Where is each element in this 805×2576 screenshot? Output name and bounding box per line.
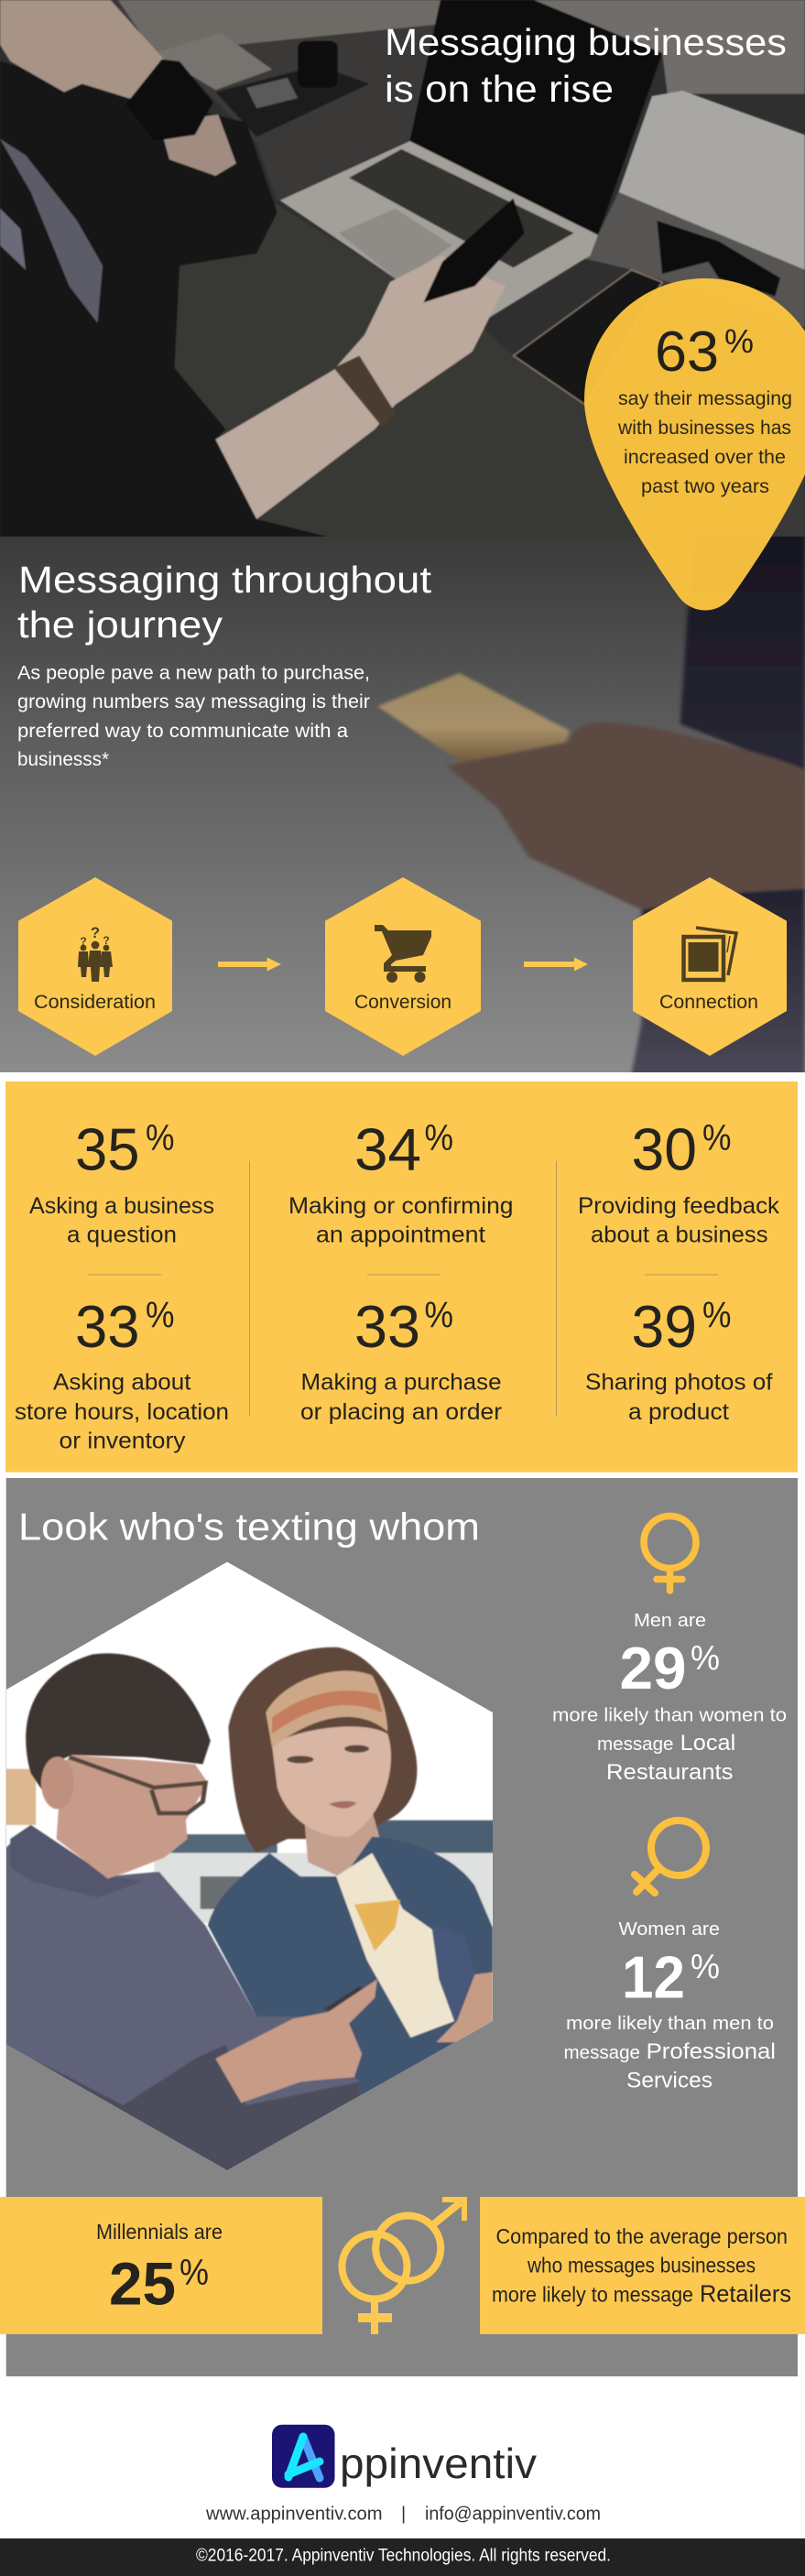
- callout: 63 percent pin: say their messaging: [618, 388, 792, 409]
- text block: journey intro: growing numbers say messaging is their: [17, 690, 370, 712]
- icon: stacked photos: [683, 928, 736, 980]
- heading: messaging businesses: is on the rise: [385, 68, 614, 110]
- text block: contact details: [205, 2505, 601, 2525]
- stat: 33 percent store hours: store hours, location: [15, 1399, 229, 1425]
- stat: women 12 percent: 12: [622, 1944, 685, 2011]
- stat: men 29 percent: message: [597, 1734, 674, 1755]
- stat: 33 percent store hours: or inventory: [59, 1429, 186, 1454]
- stat: 39 percent: %: [702, 1295, 731, 1335]
- man ear: [41, 1756, 74, 1810]
- heading: messaging businesses: [385, 21, 787, 110]
- logo: appinventiv: [272, 2425, 537, 2488]
- callout: millennials 25 percent: 25: [109, 2250, 176, 2318]
- callout: 63 percent pin: [584, 278, 805, 610]
- woman headband: [266, 1670, 387, 1748]
- stat: men 29 percent: [552, 1610, 787, 1785]
- text block: journey intro: [17, 661, 370, 770]
- phone: [324, 1985, 363, 2011]
- stat: 39 percent: a product: [628, 1399, 729, 1425]
- stat: 30 percent: 30: [632, 1116, 697, 1183]
- stat: 34 percent: Making or confirming: [288, 1193, 513, 1219]
- man neck and face: [57, 1755, 208, 1879]
- stat: women 12 percent: %: [691, 1948, 720, 1986]
- stat: men 29 percent: 29: [619, 1635, 687, 1701]
- stat: 35 percent: 35: [75, 1116, 139, 1183]
- woman neck: [304, 1813, 380, 1876]
- text block: journey intro: businesss*: [17, 748, 110, 770]
- panel: look who's texting whom: [0, 1478, 798, 2376]
- icon: shopping cart: [375, 925, 431, 983]
- woman eyes and mouth: [287, 1755, 313, 1764]
- step: connection hexagon: Connection: [659, 991, 758, 1013]
- callout: retailers comparison: Compared to the average person: [496, 2224, 788, 2248]
- callout: retailers comparison: Retailers: [700, 2280, 791, 2308]
- callout: 63 percent pin: increased over the: [624, 447, 786, 468]
- man hair: [26, 1653, 211, 1792]
- step: consideration hexagon: Consideration: [34, 991, 156, 1013]
- callout: retailers comparison: who messages businesses: [527, 2254, 756, 2277]
- stat: 33 percent purchase: Making a purchase: [300, 1370, 502, 1396]
- stat: women 12 percent: Professional: [647, 2039, 776, 2064]
- icon: people with question marks: ?: [103, 934, 110, 947]
- stat: 33 percent store hours: Asking about: [53, 1370, 191, 1396]
- callout: 63 percent pin: 63: [655, 321, 719, 384]
- icon: interlocked gender symbols: [343, 2197, 467, 2334]
- icon: people with question marks: [78, 924, 113, 982]
- stat: 30 percent: about a business: [591, 1223, 767, 1248]
- stat: 34 percent: [288, 1116, 513, 1248]
- step: conversion hexagon: [325, 877, 481, 1056]
- icon: venus symbol: [644, 1516, 696, 1591]
- stat: 35 percent: a question: [67, 1223, 177, 1248]
- stat: women 12 percent: Services: [626, 2069, 713, 2093]
- step: consideration hexagon: [18, 877, 172, 1056]
- stat: 30 percent: %: [702, 1118, 731, 1158]
- stat: men 29 percent: Local: [680, 1731, 735, 1755]
- logo: appinventiv: ppinventiv: [340, 2440, 537, 2487]
- callout: retailers comparison: more likely to message: [492, 2283, 693, 2307]
- step: conversion hexagon: Conversion: [354, 991, 451, 1013]
- footer: copyright bar: ©2016-2017. Appinventiv Technologies. All rights reserved.: [196, 2547, 611, 2566]
- stat: 39 percent: 39: [632, 1293, 697, 1360]
- woman shirt: [336, 1853, 454, 2038]
- stat: 33 percent purchase: or placing an order: [300, 1399, 502, 1425]
- stat: 33 percent store hours: %: [146, 1295, 174, 1335]
- man sweater: [6, 1842, 359, 2106]
- stat: men 29 percent: more likely than women to: [552, 1705, 787, 1726]
- stat: women 12 percent: message: [564, 2042, 640, 2063]
- woman denim jacket: [208, 1837, 493, 2119]
- stat: 30 percent: Providing feedback: [578, 1193, 780, 1219]
- heading: messaging businesses: Messaging businesses: [385, 21, 787, 63]
- stat: 39 percent: [585, 1293, 773, 1425]
- stat: 34 percent: 34: [354, 1116, 421, 1183]
- text block: contact details: info@appinventiv.com: [425, 2505, 601, 2525]
- stat: 35 percent: %: [146, 1118, 174, 1158]
- stat: men 29 percent: Restaurants: [606, 1760, 733, 1785]
- panel: activity statistics: [5, 1081, 798, 1473]
- callout: retailers comparison: [480, 2197, 805, 2334]
- stat: 34 percent: %: [425, 1118, 453, 1158]
- stat: 33 percent store hours: 33: [75, 1293, 139, 1360]
- panel: hero photo: [0, 0, 805, 538]
- stat: 33 percent store hours: [15, 1293, 229, 1454]
- stat: men 29 percent: Men are: [634, 1610, 706, 1631]
- stat: women 12 percent: [564, 1918, 776, 2093]
- icon: people with question marks: ?: [91, 924, 100, 941]
- arrow: conversion to connection: [524, 958, 588, 971]
- text block: journey intro: As people pave a new path to purchase,: [17, 661, 370, 683]
- woman face: [272, 1726, 391, 1837]
- text block: contact details: www.appinventiv.com: [205, 2505, 383, 2525]
- callout: millennials 25 percent: Millennials are: [96, 2220, 223, 2244]
- stat: 34 percent: an appointment: [316, 1223, 485, 1248]
- stat: men 29 percent: %: [691, 1639, 720, 1678]
- heading: messaging throughout the journey: the journey: [17, 603, 223, 646]
- icon: people with question marks: ?: [80, 935, 87, 948]
- callout: millennials 25 percent: [0, 2197, 322, 2334]
- icon: logo mark: [272, 2425, 335, 2488]
- photo: two people looking at a phone: [0, 1557, 499, 2179]
- callout: 63 percent pin: past two years: [641, 476, 769, 497]
- callout: 63 percent pin: with businesses has: [617, 418, 791, 439]
- stat: women 12 percent: Women are: [619, 1918, 720, 1940]
- stat: 33 percent purchase: 33: [354, 1293, 420, 1360]
- heading: messaging throughout the journey: Messaging throughout: [18, 559, 432, 601]
- heading: messaging throughout the journey: [17, 559, 432, 646]
- stat: women 12 percent: more likely than men to: [566, 2013, 774, 2034]
- icon: rotated venus symbol: [635, 1821, 706, 1893]
- footer: copyright bar: [0, 2538, 805, 2576]
- arrow: consideration to conversion: [218, 958, 281, 971]
- text block: journey intro: preferred way to communicate with a: [17, 720, 348, 742]
- step: connection hexagon: [633, 877, 787, 1056]
- callout: millennials 25 percent: %: [179, 2253, 209, 2293]
- text block: contact details: |: [401, 2505, 406, 2525]
- stat: 30 percent: [578, 1116, 780, 1248]
- stat: 33 percent purchase: %: [425, 1295, 453, 1335]
- stat: 33 percent purchase: [300, 1293, 502, 1425]
- man hands: [215, 1979, 377, 2103]
- woman hair: [228, 1647, 417, 1853]
- heading: look who's texting whom: Look who's texting whom: [18, 1505, 480, 1549]
- man glasses: [70, 1757, 205, 1813]
- panel: messaging journey background: [0, 531, 805, 1074]
- stat: 35 percent: [29, 1116, 214, 1248]
- callout: 63 percent pin: %: [724, 322, 754, 360]
- stat: 39 percent: Sharing photos of: [585, 1370, 773, 1396]
- stat: 35 percent: Asking a business: [29, 1193, 214, 1219]
